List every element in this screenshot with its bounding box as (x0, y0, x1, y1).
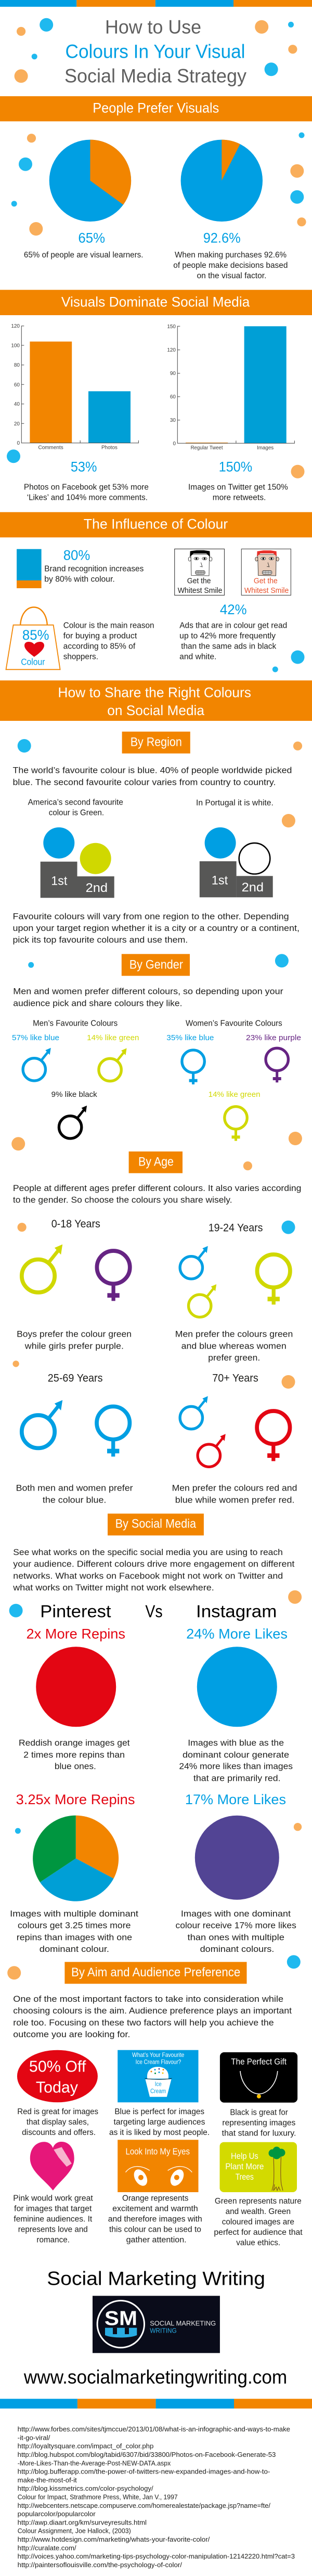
bar chart: Twitter regular tweet vs images: 30 (170, 418, 176, 423)
icon: face (188, 550, 212, 576)
references: make-the-most-of-it (18, 2477, 77, 2484)
text block: One of the most important factors to take into consideration while (13, 1995, 283, 2004)
stat: 150%: more retweets. (213, 494, 266, 502)
references: -More-Likes-Than-the-Average-Post-NEW-DATA.aspx (18, 2460, 171, 2467)
card: blue: Blue is perfect for images (114, 2107, 204, 2116)
pie chart: three colours (33, 1816, 119, 1901)
text block (12, 766, 292, 787)
icon: heart (30, 2142, 74, 2191)
stat: 65%: 65% of people are visual learners. (24, 251, 144, 260)
text block: outcome you are looking for. (13, 2030, 130, 2039)
age group: 70+ years (172, 1373, 297, 1505)
icon: shopping bag 85%: Colour (21, 656, 45, 667)
Instagram: one colour: Images with one dominant (181, 1909, 291, 1919)
card: blue: What’s Your Favourite (132, 2051, 185, 2059)
references: http://loyaltysquare.com/impact_of_color.php (18, 2443, 153, 2450)
Instagram: one colour: 17% More Likes (185, 1792, 286, 1807)
icon: shopping bag 85%: 85% (22, 627, 49, 643)
references: popularcolor/popularcolor (18, 2510, 96, 2518)
Instagram: blue: Images with blue as the (188, 1739, 284, 1748)
Pinterest: multiple colours: dominant colour. (40, 1945, 109, 1954)
Instagram: blue: dominant colour generate (183, 1750, 289, 1759)
card: blue: targeting large audiences (113, 2118, 205, 2127)
Instagram: blue: 24% more likes than images (179, 1762, 293, 1771)
logo: WRITING (150, 2327, 177, 2335)
panel: by age (12, 1151, 301, 1505)
panel: the influence of colour (0, 512, 312, 672)
card: orange: and therefore images with (108, 2215, 202, 2224)
bar chart: Twitter regular tweet vs images (167, 324, 294, 451)
bottom colour bar (0, 2399, 312, 2409)
Instagram: blue: 24% More Likes (186, 1626, 288, 1642)
age group: 19-24 years: Men prefer the colours green (175, 1330, 293, 1339)
podium: America (41, 827, 114, 898)
icon: 80% bar (17, 549, 42, 588)
text block (12, 912, 300, 945)
decorative dots: header (15, 18, 297, 83)
Pinterest: reddish orange: 2 times more repins than (23, 1750, 125, 1759)
stat: 92.6%: When making purchases 92.6% (175, 251, 287, 260)
references: http://webcenters.netscape.compuserve.com/homerealestate/package.jsp?name=fte/ (18, 2502, 271, 2509)
text block: choosing colours is the aim. Audience preference plays an important (13, 2007, 292, 2016)
bar chart: Twitter regular tweet vs images: Images (257, 445, 274, 451)
icon: eyes (126, 2167, 192, 2188)
stat: 85% text: according to 85% of (63, 642, 136, 651)
panel: people prefer visuals (0, 96, 312, 280)
card: pink: represents love and (18, 2225, 88, 2234)
male: 9% black (51, 1090, 97, 1138)
panel: by social media (9, 1513, 302, 1969)
ad: colour: Whitest Smile (244, 586, 289, 595)
age group: 0-18 years: Boys prefer the colour green (17, 1330, 132, 1339)
icon: necklace (240, 2071, 278, 2099)
heading bar (0, 96, 312, 121)
pie chart: 65% (49, 140, 131, 222)
panel: by aim and audience preference (7, 1962, 303, 2247)
card: blue (109, 2050, 210, 2137)
Instagram: one colour (176, 1792, 296, 1954)
title (64, 16, 246, 86)
Instagram: blue (179, 1626, 293, 1783)
bar chart: Facebook comments vs photos: 80 (14, 363, 20, 368)
text block: upon your target region whether it is a city or a country or a continent, (12, 924, 300, 933)
female: 35% blue (166, 1033, 214, 1084)
subheading: By Social Media (115, 1517, 197, 1531)
podium: Portugal: 1st (212, 874, 228, 888)
icon: ice cream: Cream (150, 2088, 166, 2094)
bar chart: Twitter regular tweet vs images: 120 (167, 347, 176, 353)
stat: 150%: Images on Twitter get 150% (188, 483, 288, 492)
references (18, 2426, 295, 2569)
female: 23% purple: 23% like purple (246, 1033, 301, 1042)
title: Colours In Your Visual (66, 41, 245, 62)
female: 14% green: 14% like green (209, 1090, 260, 1099)
bar chart: Twitter regular tweet vs images: 0 (173, 441, 176, 447)
Pinterest: multiple colours: repins than images with one (17, 1933, 132, 1942)
card: blue: Ice Cream Flavour? (136, 2058, 181, 2065)
female: 14% green (209, 1090, 260, 1141)
bar chart: Facebook comments vs photos: 60 (14, 382, 20, 388)
heading: how to share the right colours: How to Share the Right Colours (58, 685, 251, 701)
references: http://awp.diaart.org/km/surveyresults.html (18, 2519, 147, 2526)
stat: 42%: and white. (179, 652, 216, 661)
text block (13, 987, 283, 1008)
panel: by region (12, 732, 302, 945)
card: green: perfect for audience that (214, 2228, 303, 2237)
title: Social Media Strategy (64, 65, 246, 86)
subheading (122, 954, 190, 976)
bar chart: Twitter regular tweet vs images: Regular Tweet (191, 445, 223, 451)
male: 9% black: 9% like black (51, 1090, 97, 1099)
icon: coloured face (255, 550, 279, 576)
icon: tree (268, 2147, 285, 2191)
bar chart: Facebook comments vs photos: Comments (38, 445, 63, 450)
stat: 85% text: Colour is the main reason (63, 622, 154, 630)
Pinterest: reddish orange: blue ones. (55, 1762, 96, 1771)
text block: pick its top favourite colours and use them. (12, 936, 188, 945)
Pinterest: multiple colours: 3.25x More Repins (16, 1792, 135, 1807)
card: red (17, 2050, 98, 2137)
stat: 42%: 42% (220, 602, 246, 617)
references: http://blog.hubspot.com/blog/tabid/6307/bid/33800/Photos-on-Facebook-Generate-53 (18, 2451, 276, 2458)
website address: www.socialmarketingwriting.com (23, 2366, 287, 2388)
card: red: Red is great for images (17, 2107, 98, 2116)
card: green: and wealth. Green (226, 2207, 291, 2216)
card: pink: romance. (36, 2236, 70, 2245)
stat: 85% text: shoppers. (63, 652, 98, 661)
stat: 80% (44, 548, 144, 584)
Pinterest: reddish orange (19, 1626, 130, 1771)
male: 14% green (87, 1033, 139, 1081)
text block: Men and women prefer different colours, so depending upon your (13, 987, 283, 996)
card: green: Trees (236, 2172, 254, 2182)
stat: 42%: than the same ads in black (181, 642, 276, 651)
card: black: that stand for luxury. (222, 2129, 296, 2138)
card: red: Today (36, 2078, 78, 2096)
heading: how to share the right colours: on Social Media (107, 703, 205, 718)
card: black: Black is great for (230, 2108, 288, 2117)
heading bar: People Prefer Visuals (93, 100, 219, 116)
age group: 0-18 years: 0-18 Years (51, 1218, 100, 1230)
stat: 80%: by 80% with colour. (44, 575, 115, 584)
card: orange: Orange represents (122, 2194, 189, 2203)
card: orange: gather attention. (126, 2236, 187, 2245)
text block: to the gender. So choose the colours you share wisely. (13, 1196, 232, 1205)
references: Colour Assignment, Joe Hallock, (2003) (18, 2528, 131, 2535)
age group: 25-69 years: the colour blue. (43, 1495, 106, 1505)
icon: shopping bag 85% (6, 607, 60, 669)
pie chart: 92.6% (181, 140, 263, 222)
age group: 0-18 years (17, 1218, 132, 1351)
card: red: 50% Off (29, 2057, 86, 2075)
subheading: By Region (131, 735, 182, 749)
subheading (64, 1962, 247, 1984)
comparison heading: Vs (145, 1601, 163, 1621)
references: http://curalate.com/ (18, 2544, 76, 2552)
card: pink: Pink would work great (13, 2194, 93, 2203)
text block: blue. The second favourite colour varies from country to country. (12, 778, 276, 787)
subheading: By Age (138, 1155, 174, 1169)
references: http://www.hotdesign.com/marketing/whats-your-favorite-color/ (18, 2536, 210, 2543)
decorative dots (28, 954, 289, 968)
text block: People at different ages prefer different colours. It also varies according (13, 1184, 301, 1193)
Pinterest: multiple colours: colours get 3.25 times more (18, 1921, 131, 1931)
decorative dot (7, 1966, 21, 1979)
card: black: representing images (222, 2119, 296, 2128)
references: http://blog.kissmetrics.com/color-psychology/ (18, 2485, 153, 2492)
podium: Portugal: 2nd (242, 881, 264, 895)
text block: what works on Twitter might not work elsewhere. (12, 1583, 214, 1593)
female: 23% purple (246, 1033, 301, 1082)
bar chart: Facebook comments vs photos: Photos (101, 445, 118, 450)
Pinterest: reddish orange: 2x More Repins (26, 1626, 125, 1642)
bar chart: Facebook comments vs photos (11, 323, 138, 450)
text block: networks. What works on Facebook might not work on Twitter and (13, 1571, 283, 1581)
bar chart: Twitter regular tweet vs images: 90 (170, 371, 176, 377)
age group: 25-69 years (16, 1373, 133, 1505)
stat: 80%: Brand recognition increases (44, 564, 144, 573)
stat: 80%: 80% (63, 548, 90, 563)
top colour bar (0, 0, 312, 7)
card: black (220, 2052, 297, 2138)
icon: ice cream (145, 2067, 172, 2097)
women's heading: Women’s Favourite Colours (186, 1019, 282, 1028)
card: red: discounts and offers. (22, 2128, 96, 2137)
decorative dots (18, 739, 302, 827)
heading bar (0, 290, 312, 315)
stat: 85% text: for buying a product (63, 632, 137, 641)
podium: America: 1st (51, 874, 68, 888)
references: http://blog.bufferapp.com/the-power-of-twitters-new-expanded-images-and-how-to- (18, 2468, 270, 2476)
text block: The world’s favourite colour is blue. 40% of people worldwide picked (12, 766, 292, 775)
card: orange: this colour can be used to (109, 2225, 201, 2234)
heading: how to share the right colours (0, 680, 312, 721)
stat: 53%: 53% (71, 459, 97, 475)
decorative dots (272, 650, 305, 672)
stat: 42%: up to 42% more frequently (179, 632, 276, 641)
text block (13, 1995, 292, 2039)
Instagram: one colour: colour receive 17% more likes (176, 1921, 296, 1931)
text block: role too. Focusing on these two factors will help you achieve the (13, 2018, 274, 2027)
age group: 70+ years: 70+ Years (212, 1373, 258, 1384)
stat: 53% (24, 459, 149, 502)
subheading: By Aim and Audience Preference (71, 1965, 240, 1979)
card: pink: for images that target (14, 2205, 92, 2213)
stat: 92.6% (173, 230, 288, 280)
logo: SOCIAL MARKETING (150, 2319, 216, 2327)
Instagram: blue: that are primarily red. (193, 1774, 281, 1783)
logo: SM (105, 2308, 137, 2330)
bar chart: Twitter regular tweet vs images: 150 (167, 324, 176, 330)
bar chart: Facebook comments vs photos: 100 (11, 343, 20, 348)
card: orange: Look Into My Eyes (126, 2146, 190, 2156)
card: green: coloured images are (222, 2218, 294, 2227)
card: orange (108, 2140, 202, 2245)
stat: 150%: 150% (219, 459, 252, 475)
bar chart: Facebook comments vs photos: 40 (14, 402, 20, 407)
Portugal caption: In Portugal it is white. (196, 798, 274, 807)
stat: 92.6%: on the visual factor. (197, 271, 266, 280)
stat: 42%: Ads that are in colour get read (179, 622, 287, 630)
text block (12, 1548, 295, 1593)
comparison heading: Pinterest (40, 1601, 111, 1621)
card: pink (13, 2142, 93, 2245)
card: green (214, 2142, 303, 2247)
references: http://voices.yahoo.com/marketing-tips-psychology-color-manipulation-12142220.html?cat=3 (18, 2553, 295, 2560)
ad: colour: Get the (254, 577, 278, 586)
Instagram: one colour: than ones with multiple (187, 1933, 284, 1942)
America caption (28, 798, 123, 817)
references: http://www.forbes.com/sites/tjmccue/2013/01/08/what-is-an-infographic-and-ways-to-make (18, 2426, 290, 2433)
stat: 85% text (63, 622, 154, 661)
ad: black and white: Whitest Smile (178, 586, 223, 595)
male: 57% blue (12, 1033, 59, 1081)
card: green: Help Us (231, 2151, 258, 2161)
subheading (129, 1151, 183, 1173)
bar chart: Twitter regular tweet vs images: 60 (170, 394, 176, 400)
references: http://paintersoflouisville.com/the-psychology-of-color/ (18, 2561, 183, 2569)
bar chart: Facebook comments vs photos: 120 (11, 323, 20, 329)
ad: black and white: Get the (187, 577, 211, 586)
Pinterest: multiple colours (10, 1792, 138, 1954)
male: 14% green: 14% like green (87, 1033, 139, 1042)
age group: 0-18 years: while girls prefer purple. (24, 1341, 124, 1351)
Pinterest: multiple colours: Images with multiple dominant (10, 1909, 138, 1919)
text block: See what works on the specific social media you are using to reach (13, 1548, 283, 1557)
men's heading: Men’s Favourite Colours (33, 1019, 118, 1028)
panel: visuals dominate social media (0, 290, 312, 502)
stat: 92.6%: 92.6% (203, 230, 241, 246)
logo (93, 2296, 220, 2353)
references: Colour for Impact, Strathmore Press, White, Jan V., 1997 (18, 2493, 178, 2501)
stat: 53%: ‘Likes’ and 104% more comments. (27, 494, 148, 502)
podium: Portugal (200, 827, 273, 897)
ad: colour (241, 549, 291, 595)
age group: 25-69 years: Both men and women prefer (16, 1484, 133, 1493)
heading bar: The Influence of Colour (84, 516, 228, 532)
card: green: Green represents nature (215, 2197, 302, 2206)
stat: 53%: Photos on Facebook get 53% more (24, 483, 149, 492)
decorative dots (11, 1132, 302, 1150)
card: blue: as it is liked by most people. (109, 2128, 210, 2137)
card: green: Plant More (225, 2161, 264, 2171)
icon: ice cream: Ice (155, 2081, 162, 2088)
text block: your audience. Different colours drive more engagement on different (13, 1560, 295, 1569)
age group: 19-24 years: 19-24 Years (209, 1222, 263, 1234)
card: red: that display sales, (27, 2118, 89, 2127)
age group: 19-24 years: and blue whereas women (181, 1341, 287, 1351)
text block: Favourite colours will vary from one region to the other. Depending (12, 912, 289, 921)
card: green: value ethics. (236, 2238, 280, 2247)
subheading: By Gender (129, 957, 183, 972)
Pinterest: reddish orange: Reddish orange images get (19, 1739, 130, 1748)
ad: black and white (175, 549, 225, 595)
podium: America: 2nd (86, 881, 108, 895)
heading bar (0, 512, 312, 537)
text block (13, 1184, 301, 1205)
stat: 150% (188, 459, 288, 502)
stat: 65%: 65% (78, 230, 105, 246)
age group: 19-24 years: prefer green. (208, 1353, 260, 1363)
America caption: America’s second favourite (28, 798, 123, 807)
references: -it-go-viral/ (18, 2434, 50, 2441)
Instagram: one colour: dominant colours. (200, 1945, 274, 1954)
title: How to Use (105, 16, 201, 37)
male: 57% blue: 57% like blue (12, 1033, 59, 1042)
subheading (122, 732, 190, 754)
brand name: Social Marketing Writing (47, 2268, 265, 2289)
decorative dots (7, 449, 305, 478)
bar chart: Facebook comments vs photos: 0 (17, 441, 20, 446)
female: 35% blue: 35% like blue (166, 1033, 214, 1042)
card: black: The Perfect Gift (231, 2057, 287, 2066)
decorative dots (11, 132, 306, 236)
card: orange: excitement and warmth (112, 2205, 198, 2213)
age group: 70+ years: Men prefer the colours red and (172, 1484, 297, 1493)
stat: 92.6%: of people make decisions based (173, 261, 288, 270)
stat: 42% (179, 602, 287, 661)
panel: by gender (11, 954, 302, 1150)
age group: 25-69 years: 25-69 Years (48, 1373, 103, 1384)
age group: 70+ years: blue while women prefer red. (175, 1495, 294, 1505)
decorative dots (9, 1590, 302, 1969)
bar chart: Facebook comments vs photos: 20 (14, 421, 20, 427)
subheading (108, 1513, 204, 1535)
America caption: colour is Green. (49, 808, 104, 817)
stat: 65% (24, 230, 144, 260)
decorative dots (12, 1161, 295, 1389)
heading bar: Visuals Dominate Social Media (61, 294, 250, 309)
comparison heading: Instagram (196, 1601, 277, 1621)
card: pink: feminine audiences. It (14, 2215, 93, 2224)
comparison heading (40, 1601, 277, 1621)
age group: 19-24 years (175, 1222, 293, 1363)
text block: audience pick and share colours they like. (13, 999, 183, 1008)
